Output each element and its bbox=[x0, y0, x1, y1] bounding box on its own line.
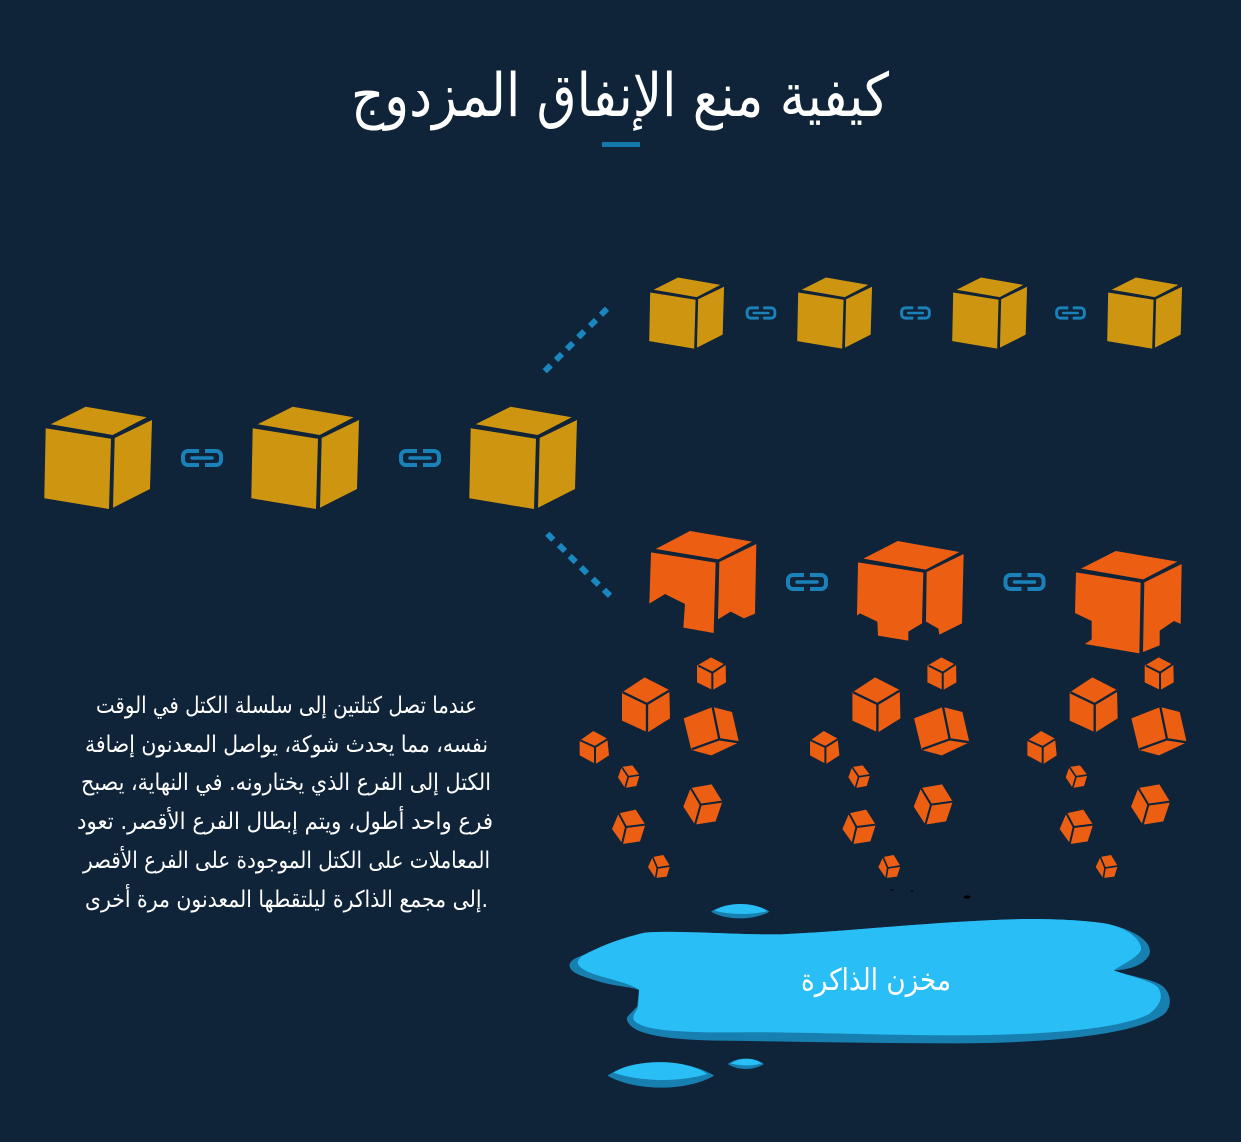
link 2 bbox=[401, 451, 439, 465]
falling fragments under block 3 bbox=[1027, 657, 1187, 878]
line 2: نفسه، مما يحدث شوكة، يواصل المعدنون إضافة bbox=[85, 732, 488, 758]
upper block 4 bbox=[1107, 277, 1182, 349]
lower link 1 bbox=[788, 575, 826, 589]
crumbling block 2 bbox=[857, 541, 964, 641]
falling fragments under block 1 bbox=[580, 657, 739, 878]
dotted fork line down bbox=[547, 534, 610, 596]
specks bbox=[890, 890, 970, 899]
block 1 bbox=[44, 407, 152, 509]
block 2 bbox=[251, 407, 359, 509]
upper block 2 bbox=[797, 277, 872, 349]
block 3 bbox=[469, 407, 577, 509]
main chain: three gold blocks bbox=[44, 407, 577, 509]
memory pool puddle bbox=[569, 919, 1170, 1043]
line 5: المعاملات على الكتل الموجودة على الفرع الأقصر bbox=[82, 846, 490, 874]
droplet top bbox=[711, 904, 770, 918]
dotted fork line up bbox=[545, 309, 607, 371]
upper link 2 bbox=[902, 308, 929, 318]
upper link 1 bbox=[747, 308, 775, 318]
droplet bottom left bbox=[607, 1062, 714, 1088]
upper block 3 bbox=[952, 277, 1027, 349]
lower branch: crumbling orange blocks bbox=[649, 531, 1182, 653]
line 6: إلى مجمع الذاكرة ليلتقطها المعدنون مرة أخرى. bbox=[85, 884, 488, 913]
line 3: الكتل إلى الفرع الذي يختارونه. في النهاية، يصبح bbox=[81, 770, 491, 796]
falling fragments under block 2 bbox=[810, 657, 969, 878]
puddle label: مخزن الذاكرة bbox=[801, 963, 951, 998]
line 1: عندما تصل كتلتين إلى سلسلة الكتل في الوقت bbox=[96, 693, 477, 719]
explanation paragraph bbox=[77, 693, 493, 913]
puddle shape bbox=[569, 919, 1170, 1043]
lower link 2 bbox=[1006, 575, 1044, 589]
link 1 bbox=[183, 451, 221, 465]
droplet bottom small bbox=[728, 1058, 764, 1069]
upper link 3 bbox=[1057, 308, 1084, 318]
line 4: فرع واحد أطول، ويتم إبطال الفرع الأقصر. تعود bbox=[77, 806, 493, 835]
title underline bbox=[602, 142, 640, 147]
title: كيفية منع الإنفاق المزدوج bbox=[351, 61, 889, 131]
upper branch: four gold blocks bbox=[649, 277, 1182, 349]
crumbling block 3 bbox=[1075, 551, 1182, 653]
upper block 1 bbox=[649, 277, 724, 349]
crumbling block 1 bbox=[649, 531, 756, 633]
